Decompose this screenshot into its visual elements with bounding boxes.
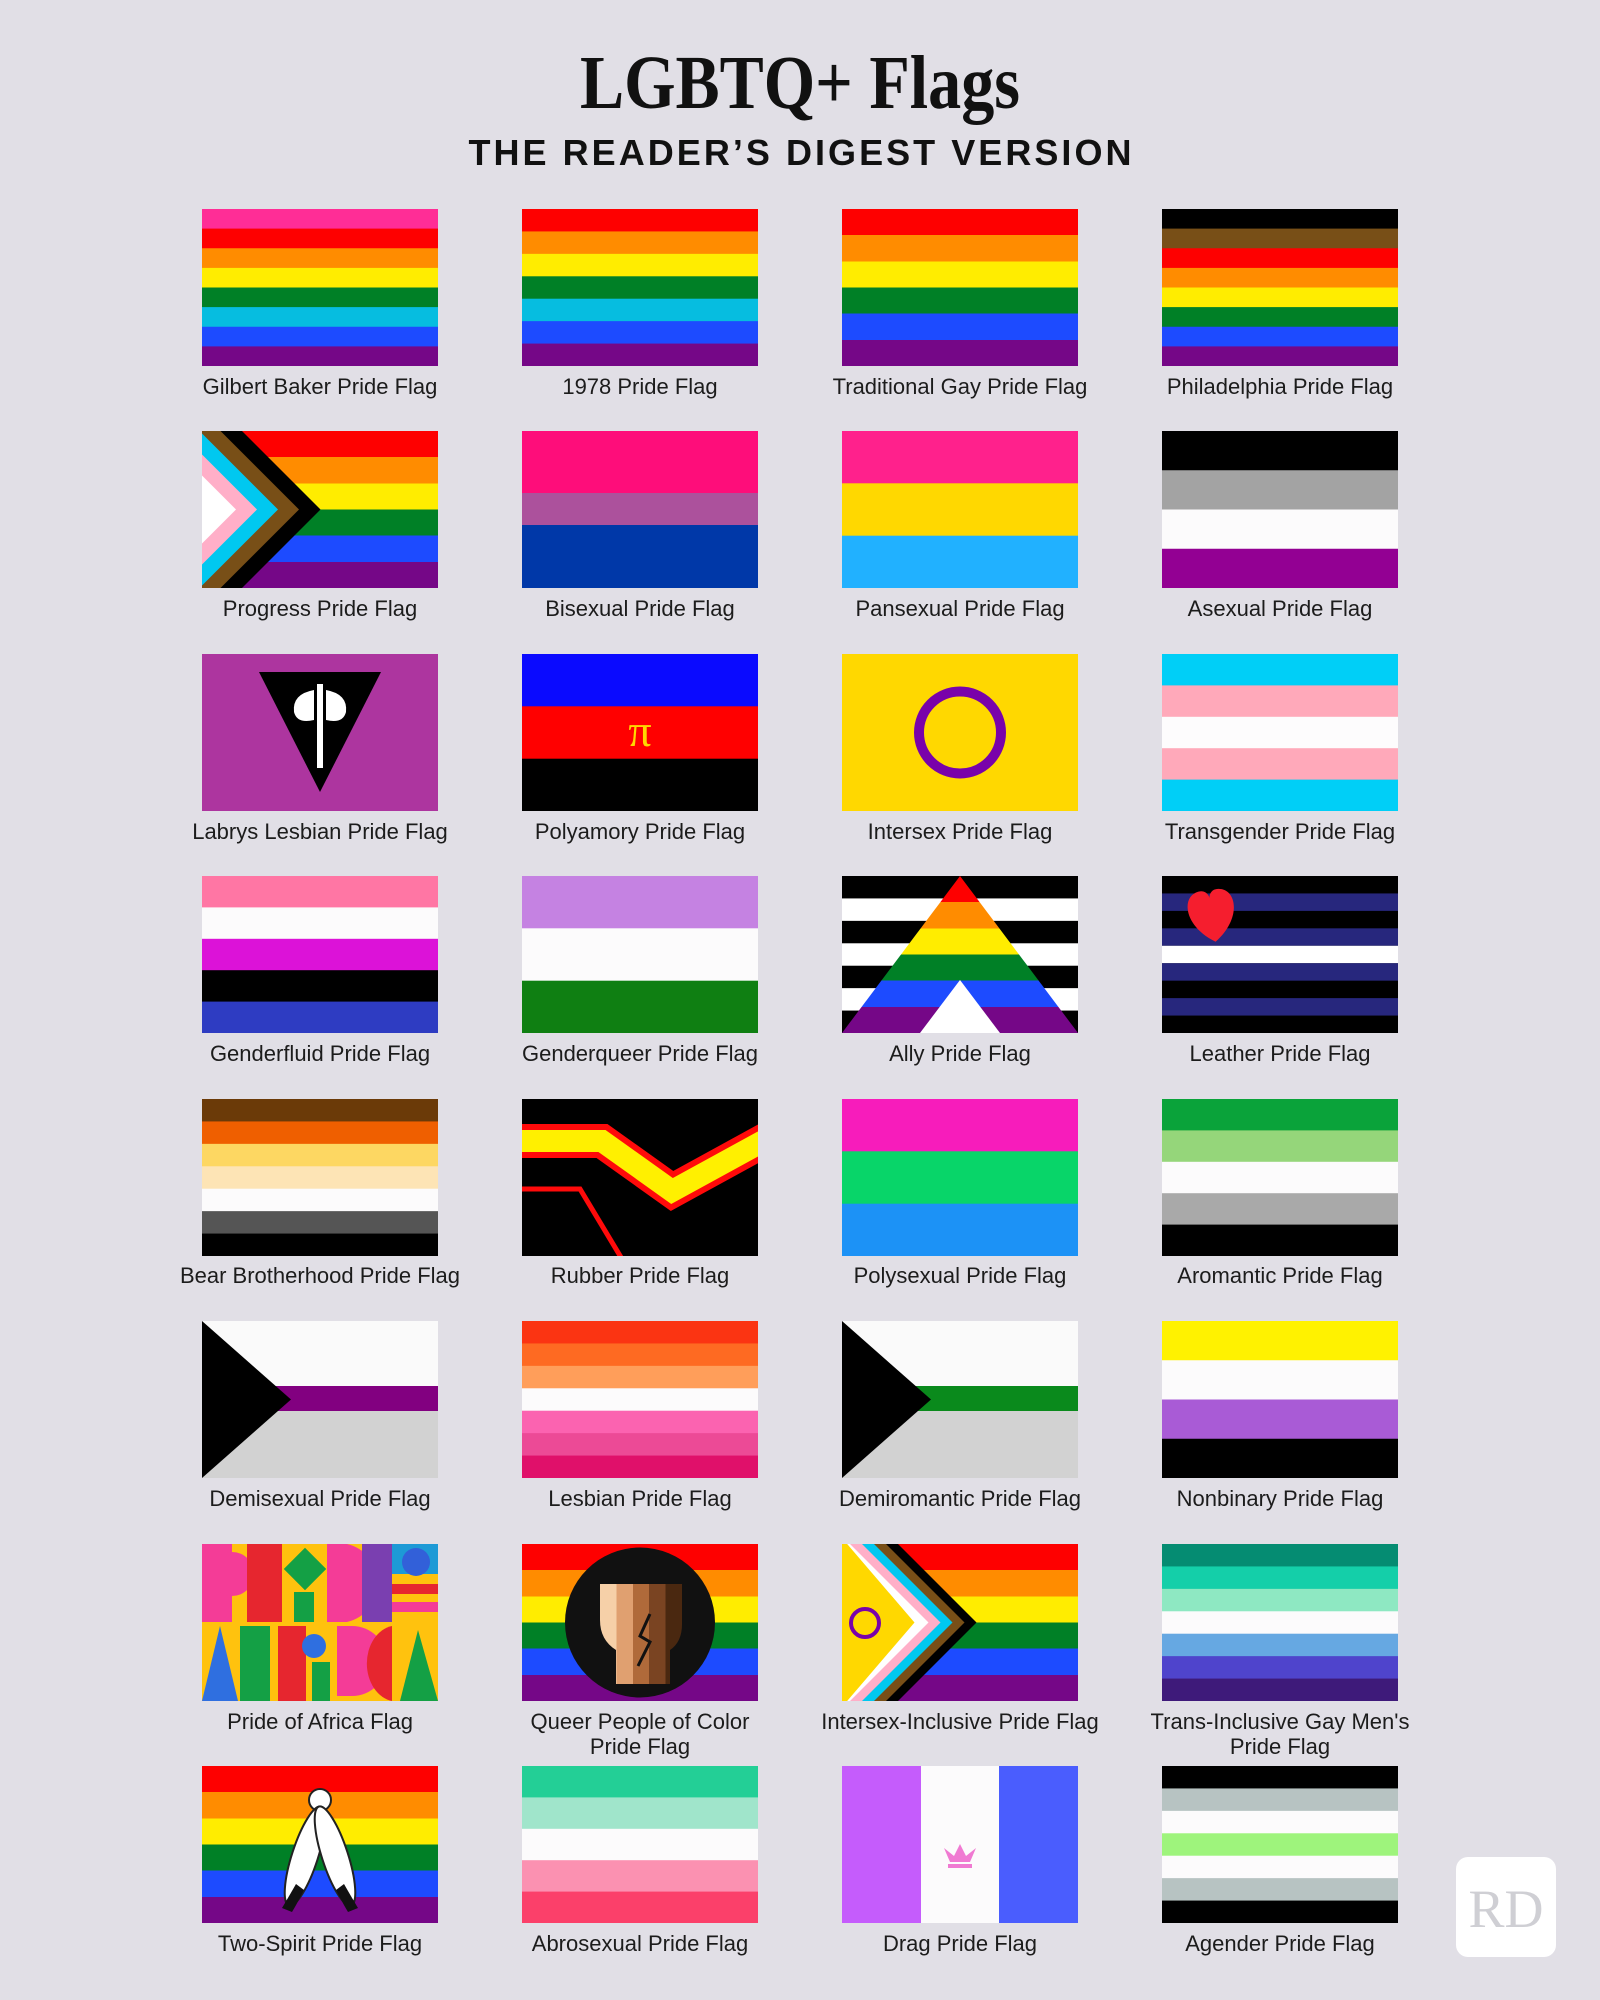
flag: Rubber (517, 1099, 767, 1288)
flag: Genderqueer: Genderqueer Pride Flag (522, 1041, 758, 1066)
flag: Queer People of Color: Pride Flag (590, 1734, 690, 1759)
flag: Intersex: Intersex Pride Flag (868, 819, 1052, 844)
flag: Polyamory (522, 654, 758, 844)
logo: RD (1456, 1857, 1556, 1957)
flag: Transgender: Transgender Pride Flag (1165, 819, 1395, 844)
flag: Gilbert Baker (202, 209, 438, 399)
flag: Traditional (833, 209, 1087, 399)
flag: Abrosexual: Abrosexual Pride Flag (532, 1931, 748, 1956)
flag: Polysexual: Polysexual Pride Flag (854, 1263, 1066, 1288)
flag: Transgender (1162, 654, 1398, 844)
flag: Aromantic: Aromantic Pride Flag (1177, 1263, 1383, 1288)
flag: Abrosexual (522, 1766, 758, 1956)
flag: Pride of Africa (202, 1544, 438, 1734)
flag: Bisexual: Bisexual Pride Flag (545, 596, 735, 621)
logo: RD: RD (1468, 1879, 1544, 1939)
flag: Labrys Lesbian (192, 654, 448, 844)
flag: Polysexual (842, 1099, 1078, 1288)
flag: Leather (1162, 876, 1398, 1066)
flag: Bear Brotherhood (180, 1099, 460, 1288)
flag: Rubber: Rubber Pride Flag (551, 1263, 729, 1288)
flag: Two-Spirit: Two-Spirit Pride Flag (218, 1931, 422, 1956)
flag: Polyamory: π (628, 705, 652, 756)
flag: Genderfluid (202, 876, 438, 1066)
flag: Nonbinary: Nonbinary Pride Flag (1177, 1486, 1383, 1511)
flag: Asexual: Asexual Pride Flag (1188, 596, 1372, 621)
flag: Demisexual (202, 1321, 438, 1511)
flag: Intersex-Inclusive (821, 1538, 1099, 1734)
flag: Genderqueer (522, 876, 758, 1066)
flag: Pansexual: Pansexual Pride Flag (855, 596, 1065, 621)
flag: Philadelphia: Philadelphia Pride Flag (1167, 374, 1393, 399)
flag: Traditional: Traditional Gay Pride Flag (833, 374, 1087, 399)
flag: Gilbert Baker: Gilbert Baker Pride Flag (203, 374, 437, 399)
flag: Demiromantic (839, 1321, 1081, 1511)
flag: Demisexual: Demisexual Pride Flag (209, 1486, 431, 1511)
flag: Progress: Progress Pride Flag (223, 596, 417, 621)
flag: Genderfluid: Genderfluid Pride Flag (210, 1041, 430, 1066)
flag: Aromantic (1162, 1099, 1398, 1288)
flag: 1978: 1978 Pride Flag (562, 374, 718, 399)
flag: Pride of Africa: Pride of Africa Flag (227, 1709, 413, 1734)
flag: Drag (842, 1766, 1078, 1956)
flag: Intersex-Inclusive: Intersex-Inclusive Pride Flag (821, 1709, 1099, 1734)
flag: Leather: Leather Pride Flag (1190, 1041, 1370, 1066)
flag: Asexual (1162, 431, 1398, 621)
flag: Ally (842, 876, 1078, 1066)
flag: Trans-Inclusive Gay Men's (1151, 1544, 1409, 1759)
flag: Bear Brotherhood: Bear Brotherhood Pride Flag (180, 1263, 460, 1288)
flag: Ally: Ally Pride Flag (889, 1041, 1031, 1066)
flag: Lesbian: Lesbian Pride Flag (548, 1486, 732, 1511)
flag: Progress (122, 431, 438, 621)
title: LGBTQ+ Flags (580, 41, 1020, 125)
flag: Agender (1162, 1766, 1398, 1956)
flag: Queer People of Color: Queer People of Color (531, 1709, 749, 1734)
flag: Two-Spirit (202, 1766, 438, 1956)
subtitle: THE READER’S DIGEST VERSION (468, 132, 1132, 173)
flag: Queer People of Color (522, 1544, 758, 1759)
flag: Trans-Inclusive Gay Men's: Trans-Inclusive Gay Men's (1151, 1709, 1409, 1734)
flag: 1978 (522, 209, 758, 399)
flag: Nonbinary (1162, 1321, 1398, 1511)
flag: Demiromantic: Demiromantic Pride Flag (839, 1486, 1081, 1511)
flag: Trans-Inclusive Gay Men's: Pride Flag (1230, 1734, 1330, 1759)
flag: Intersex (842, 654, 1078, 844)
flag: Polyamory: Polyamory Pride Flag (535, 819, 745, 844)
flag: Bisexual (522, 431, 758, 621)
flag: Pansexual (842, 431, 1078, 621)
flag: Philadelphia (1162, 209, 1398, 399)
flag: Lesbian (522, 1321, 758, 1511)
flag: Drag: Drag Pride Flag (883, 1931, 1037, 1956)
flag: Agender: Agender Pride Flag (1185, 1931, 1375, 1956)
flag: Labrys Lesbian: Labrys Lesbian Pride Flag (192, 819, 448, 844)
